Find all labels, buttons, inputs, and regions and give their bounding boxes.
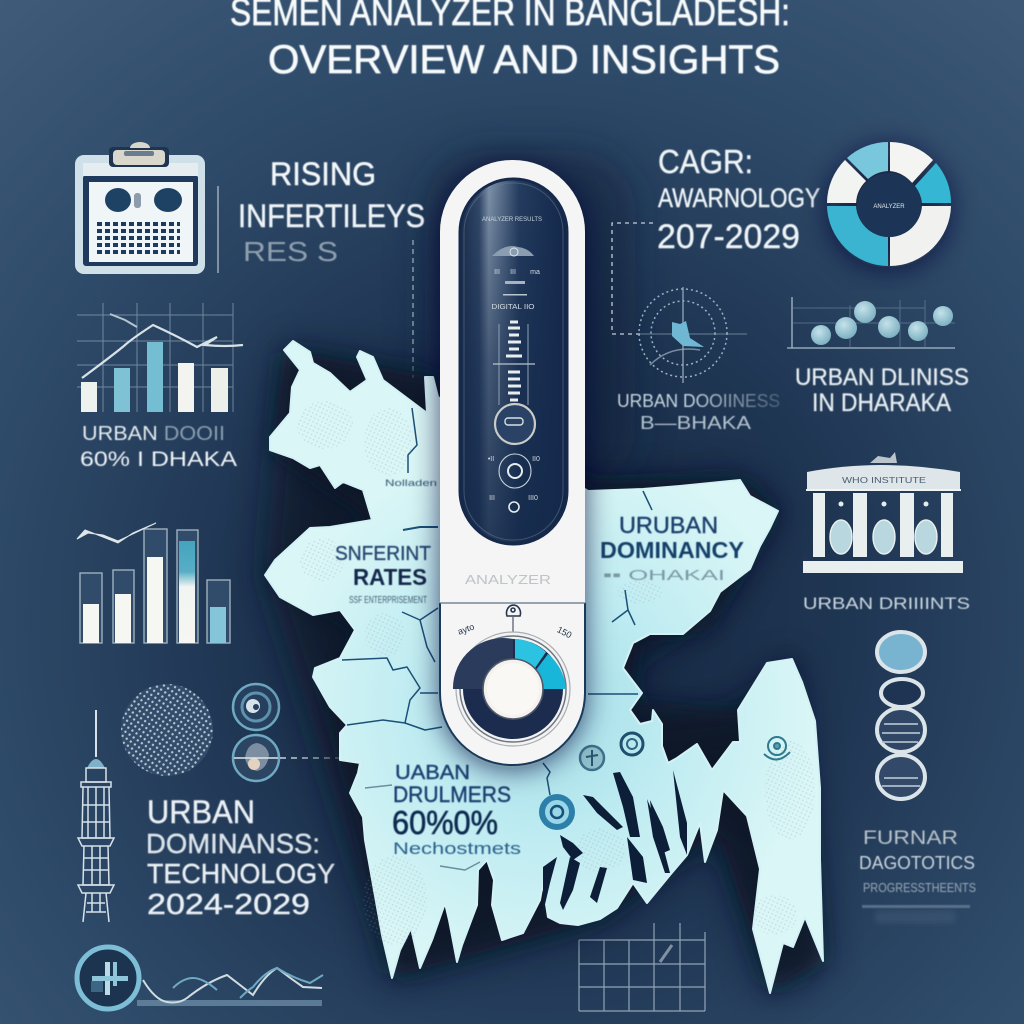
text block: urban dominance technology: TECHNOLOGY [147, 858, 335, 889]
device screen: III [510, 269, 516, 276]
device screen: III [489, 495, 495, 502]
caption: urban clinics in Dhaka: IN DHARAKA [812, 389, 951, 417]
map label: urban dominancy: DOMINANCY [600, 537, 744, 563]
map label: urban drivers 60%: Nechostmets [393, 839, 521, 858]
text block: rising infertility rates: RES S [243, 236, 338, 267]
map label: infertility rates: SNFERINT [335, 543, 431, 565]
text block: urban dominance technology: URBAN [147, 794, 255, 830]
map label: urban dominancy [600, 512, 744, 584]
bar chart: outlined bars [77, 523, 230, 643]
map pin: central [539, 794, 575, 830]
caption: urban clinics in Dhaka: URBAN DLINISS [795, 364, 969, 391]
map label: infertility rates: SSF ENTERPRISEMENT [349, 595, 427, 606]
grid: lower [579, 923, 705, 1011]
icon: dotted sphere [121, 684, 213, 776]
caption: urban clinics in Dhaka [795, 364, 969, 417]
icon: clipboard calendar [75, 142, 205, 274]
caption: urban 60% Dhaka [80, 423, 237, 471]
dot plot [787, 297, 955, 348]
text block: further diagnostics [859, 828, 976, 923]
device screen: •II [488, 456, 494, 463]
device screen: DIGITAL IIO [492, 304, 535, 311]
text block: urban dominance technology: 2024-2029 [147, 889, 310, 921]
caption: urban 60% Dhaka: 60% I DHAKA [80, 448, 237, 471]
map stipple texture [297, 401, 815, 945]
device back shadow [425, 150, 635, 490]
map bay streaks [543, 770, 687, 913]
text block: CAGR [657, 143, 820, 256]
device status icon [507, 605, 520, 632]
text block: further diagnostics: DAGOTOTICS [859, 853, 975, 873]
icons: two linked circles [233, 684, 345, 781]
text block: further diagnostics: PROGRESSTHEENTS [863, 880, 976, 895]
device: semen analyzer [440, 160, 585, 765]
map label: urban drivers 60%: DRULMERS [393, 782, 511, 807]
caption: urban drivers: URBAN DRIIIINTS [803, 594, 970, 613]
radar icon [639, 287, 747, 383]
map label: urban dominancy: URUBAN [619, 512, 718, 538]
device label: ANALYZER [465, 572, 551, 587]
text block: rising infertility rates: RISING [270, 156, 376, 192]
map label: infertility rates: RATES [353, 564, 427, 590]
map region borders [342, 408, 652, 870]
map pin: east [621, 733, 643, 755]
device screen: ma [530, 269, 540, 276]
device screen: III [494, 269, 500, 276]
title [230, 0, 790, 82]
caption: urban 60% Dhaka: URBAN DOOII [82, 423, 225, 445]
map label: infertility rates [335, 478, 437, 606]
icon: DNA helix [877, 632, 925, 799]
donut chart: ANALYZER [873, 204, 905, 210]
icon: tower [78, 710, 114, 922]
caption: urban Dhaka [617, 391, 780, 433]
map: Bangladesh [265, 341, 823, 993]
device dial labels: ayto [456, 622, 476, 637]
map pin: far east [764, 737, 790, 760]
bar chart with trend line [77, 303, 243, 412]
device screen: III0 [528, 495, 538, 502]
icon: temple with ampoules: WHO INSTITUTE [842, 476, 926, 485]
text block: further diagnostics: FURNAR [863, 828, 958, 849]
text block: CAGR: AWARNOLOGY [658, 183, 820, 213]
map label: urban drivers 60%: UABAN [395, 762, 470, 784]
text block: CAGR: 207-2029 [657, 218, 800, 256]
device screen: ANALYZER RESULTS [482, 216, 543, 223]
text block: CAGR: CAGR: [658, 143, 753, 180]
map label: urban drivers 60% [392, 762, 521, 858]
device screen: II0 [532, 456, 540, 463]
map label: urban drivers 60%: 60%0% [392, 804, 498, 841]
caption: urban Dhaka: URBAN DOOIINESS [617, 391, 780, 411]
text block: urban dominance technology: DOMINANSS: [146, 828, 320, 859]
map pin: south-east [580, 746, 604, 770]
text block: rising infertility rates [238, 156, 425, 267]
text block: rising infertility rates: INFERTILEYS [238, 198, 425, 234]
dashed connector [612, 223, 653, 334]
text block: urban dominance technology [146, 794, 335, 921]
device dial labels [456, 622, 573, 640]
map label: infertility rates: Nolladen [385, 478, 437, 488]
title: OVERVIEW AND INSIGHTS [268, 38, 780, 82]
device screen [460, 179, 567, 544]
icon and line chart: bottom [77, 947, 323, 1009]
device dial [453, 632, 570, 746]
caption: urban Dhaka: B—BHAKA [640, 413, 751, 433]
icon: temple with ampoules [803, 452, 963, 573]
donut chart [827, 142, 951, 266]
map label: urban dominancy: ▪▪ OHAKAI [603, 567, 725, 584]
map shadow [265, 350, 823, 993]
device dial labels: 150 [555, 624, 573, 640]
